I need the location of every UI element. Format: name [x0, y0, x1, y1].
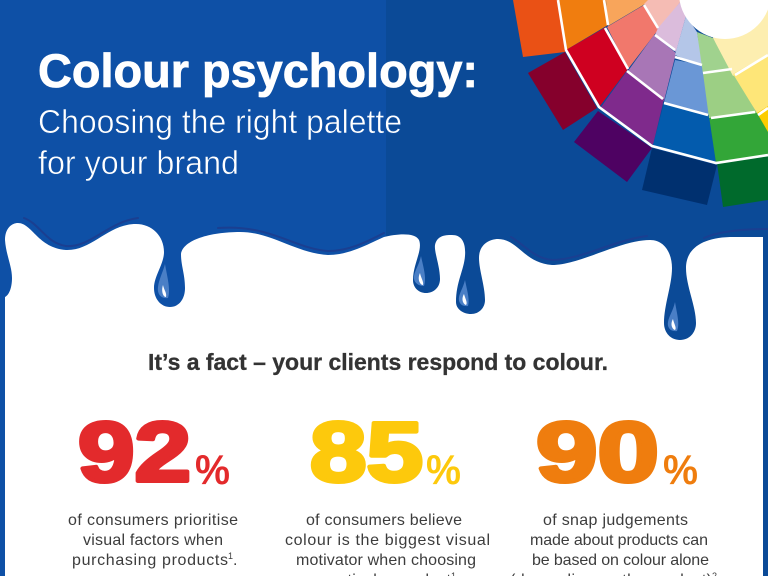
stat: 92 percent: %	[195, 446, 230, 493]
description: 92 percent: of consumers prioritise	[68, 512, 238, 529]
colour fan wheel	[513, 0, 768, 207]
description: 92 percent: 1	[228, 551, 233, 561]
stat: 90 percent: 90	[536, 405, 659, 499]
stat: 85 percent: %	[426, 446, 461, 493]
description: 85 percent: of consumers believe	[306, 512, 462, 529]
paint drip shadow strokes	[24, 218, 768, 260]
subtitle	[38, 103, 402, 181]
description: 90 percent	[510, 512, 717, 576]
description: 85 percent	[285, 512, 490, 576]
description: 92 percent: .	[233, 552, 237, 569]
stat: 90 percent	[536, 405, 698, 499]
description: 90 percent: made about products can	[530, 532, 708, 549]
stat: 85 percent: 85	[310, 405, 423, 499]
description: 90 percent: of snap judgements	[543, 512, 688, 529]
description: 90 percent: be based on colour alone	[532, 552, 709, 569]
stat: 92 percent: 92	[78, 405, 191, 499]
subtitle: for your brand	[38, 144, 239, 181]
stat: 90 percent: %	[663, 446, 698, 493]
title: Colour psychology:	[38, 44, 478, 97]
subtitle: Choosing the right palette	[38, 103, 402, 140]
stat: 85 percent	[310, 405, 461, 499]
drip highlights	[158, 256, 678, 331]
description: 92 percent: visual factors when	[83, 532, 223, 549]
white panel with paint drips	[5, 223, 763, 576]
description: 85 percent: colour is the biggest visual	[285, 532, 490, 549]
description: 92 percent: purchasing products	[72, 552, 228, 569]
description: 92 percent	[68, 512, 238, 569]
heading: client fact: It’s a fact – your clients respond to colour.	[148, 349, 608, 375]
stat: 92 percent	[78, 405, 230, 499]
description: 85 percent: motivator when choosing	[296, 552, 476, 569]
